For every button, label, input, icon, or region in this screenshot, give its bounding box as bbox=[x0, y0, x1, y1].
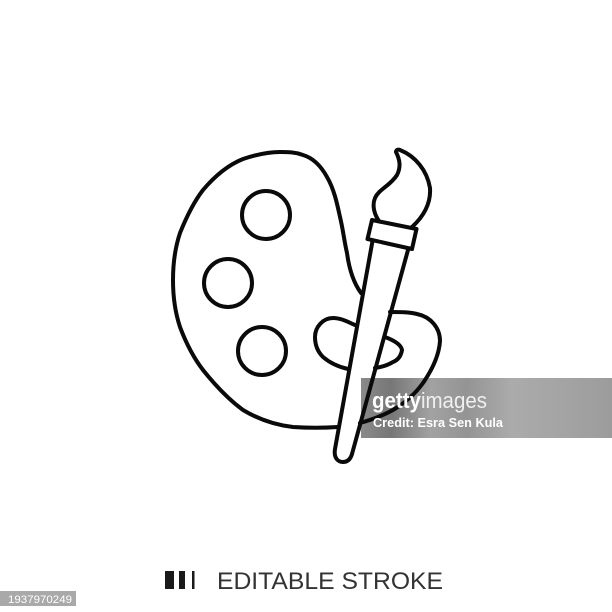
watermark text bbox=[372, 388, 504, 430]
palette thumb hole left bbox=[315, 318, 355, 369]
brush ferrule bbox=[368, 220, 416, 249]
paint well bottom bbox=[238, 327, 286, 375]
editable stroke label: EDITABLE STROKE bbox=[217, 568, 443, 595]
palette lower right edge bbox=[360, 312, 440, 423]
brush bristles bbox=[374, 150, 430, 227]
watermark logo: gettyimages bbox=[372, 388, 487, 413]
watermark credit: Credit: Esra Sen Kula bbox=[373, 416, 504, 430]
icon: artist palette and brush bbox=[173, 150, 440, 462]
stroke weight icon bbox=[165, 571, 194, 589]
image id badge: 1937970249 bbox=[8, 594, 72, 606]
palette thumb hole right bbox=[375, 337, 402, 368]
palette outline bbox=[173, 152, 361, 428]
paint well top bbox=[242, 191, 290, 239]
image id badge bbox=[0, 591, 76, 606]
brush handle bbox=[335, 241, 408, 462]
watermark panel bbox=[361, 378, 612, 438]
paint well middle bbox=[204, 259, 252, 307]
